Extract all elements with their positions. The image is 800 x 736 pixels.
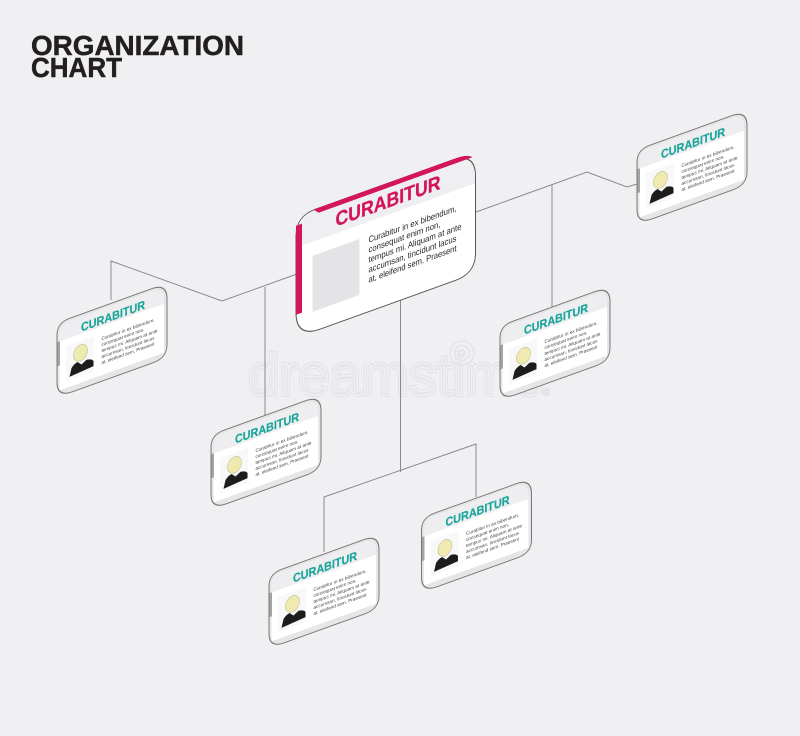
icon: person — [650, 167, 674, 204]
card 6: top right: accumsan, tincidunt lacus — [682, 162, 735, 187]
title: ORGANIZATION — [31, 30, 244, 61]
icon: person — [282, 591, 306, 628]
card 3: bottom: consequat enim non, — [314, 578, 356, 599]
card 2: lower left: at, eleifend sem. Praesent — [256, 453, 309, 478]
card 5: right: Curabitur in ex bibendum, — [544, 320, 598, 345]
connector lines — [111, 172, 637, 552]
card 5: right: consequat enim non, — [544, 330, 588, 351]
card 6: top right: consequat enim non, — [682, 154, 724, 175]
main card body text: at, eleifend sem. Praesent — [368, 243, 457, 285]
card 5: right: tempus mi. Aliquam at ante — [544, 331, 601, 357]
card 5: right — [500, 286, 610, 400]
card 6: top right: CURABITUR — [661, 125, 725, 162]
card 2: lower left: accumsan, tincidunt lacus — [256, 447, 309, 472]
card 5: right: accumsan, tincidunt lacus — [544, 338, 598, 363]
main card body text: Curabitur in ex bibendum, — [368, 203, 456, 245]
card 1: left: at, eleifend sem. Praesent — [102, 341, 155, 366]
card 3: bottom: Curabitur in ex bibendum, — [314, 568, 367, 593]
card 4: bottom right: tempus mi. Aliquam at ante — [466, 523, 522, 549]
icon: person — [224, 452, 248, 489]
icon: person — [434, 535, 458, 572]
pink left strip — [296, 224, 302, 315]
card 3: bottom: CURABITUR — [293, 549, 357, 586]
card 3: bottom: accumsan, tincidunt lacus — [314, 586, 367, 611]
card 6: top right: tempus mi. Aliquam at ante — [682, 155, 738, 181]
title — [31, 30, 244, 83]
watermark: dreamstime — [248, 343, 544, 408]
card 3: bottom — [269, 534, 379, 648]
main card body text: accumsan, tincidunt lacus — [368, 233, 457, 275]
main card body text: consequat enim non, — [368, 219, 440, 255]
card 2: lower left: Curabitur in ex bibendum, — [256, 429, 309, 454]
card 3: bottom: tempus mi. Aliquam at ante — [314, 579, 370, 605]
main card body text — [368, 201, 462, 285]
card 2: lower left — [211, 395, 321, 509]
image placeholder — [312, 239, 360, 312]
card 1: left: Curabitur in ex bibendum, — [102, 317, 155, 342]
card 5: right: CURABITUR — [524, 301, 588, 338]
card 6: top right: Curabitur in ex bibendum, — [682, 144, 735, 169]
card 4: bottom right — [422, 478, 532, 592]
card 3: bottom: at, eleifend sem. Praesent — [314, 592, 367, 617]
card 1: left: CURABITUR — [81, 298, 145, 335]
icon: person — [70, 340, 94, 377]
card 2: lower left: tempus mi. Aliquam at ante — [256, 440, 312, 466]
title: CHART — [31, 52, 122, 83]
main card body text: tempus mi. Aliquam at ante — [368, 221, 461, 265]
card 1: left: tempus mi. Aliquam at ante — [102, 328, 158, 354]
card 4: bottom right: consequat enim non, — [466, 522, 509, 543]
card 2: lower left: consequat enim non, — [256, 439, 298, 460]
card 4: bottom right: Curabitur in ex bibendum, — [466, 512, 519, 537]
card 1: left: consequat enim non, — [102, 327, 144, 348]
card 5: right: at, eleifend sem. Praesent — [544, 344, 598, 369]
card 6: top right — [637, 110, 747, 224]
card 1: left: accumsan, tincidunt lacus — [102, 335, 155, 360]
watermark: dreamstime — [248, 343, 544, 408]
card 6: top right: at, eleifend sem. Praesent — [682, 168, 735, 193]
card 4: bottom right: accumsan, tincidunt lacus — [466, 530, 520, 555]
card 4: bottom right: CURABITUR — [446, 493, 510, 530]
main card heading: CURABITUR — [336, 171, 441, 231]
card 1: left — [57, 283, 167, 397]
card 4: bottom right: at, eleifend sem. Praesent — [466, 536, 520, 561]
icon: person — [512, 343, 536, 380]
main card — [296, 151, 476, 338]
pink top strip — [314, 152, 472, 215]
card 2: lower left: CURABITUR — [235, 410, 299, 447]
